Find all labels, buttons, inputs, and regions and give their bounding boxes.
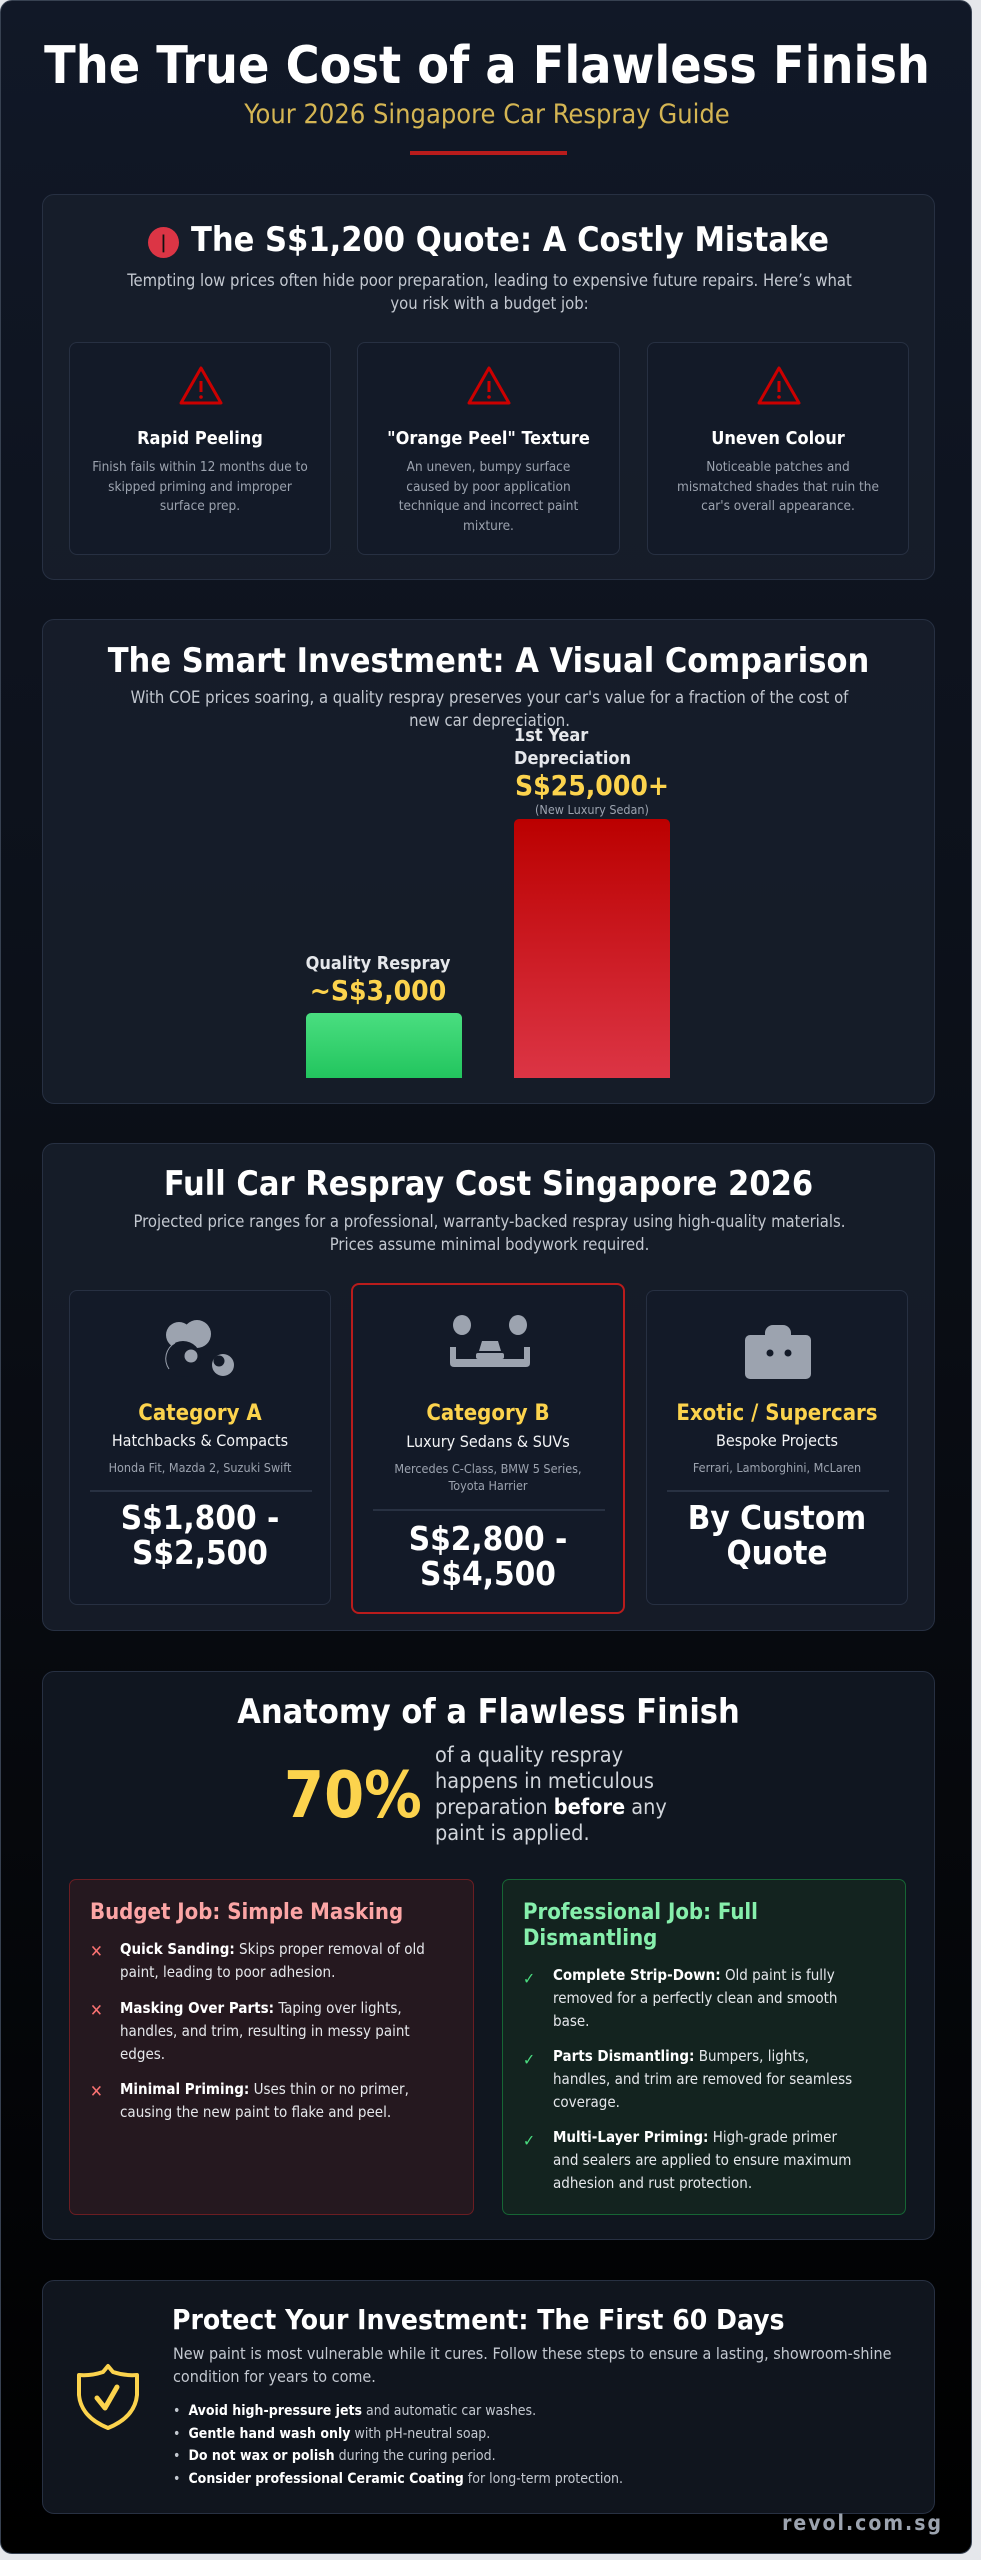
- bar label: depreciation: Depreciation: [514, 748, 631, 769]
- card: category B (highlighted): [351, 1283, 625, 1614]
- bar label: quality respray: ~S$3,000: [310, 974, 446, 1007]
- bullet list: [173, 2403, 623, 2486]
- item: priming: ✓: [523, 2131, 535, 2150]
- heading: S$1,200 quote: |: [160, 232, 166, 253]
- subtitle: Your 2026 Singapore Car Respray Guide: [244, 99, 730, 130]
- intro text: Projected price ranges for a professional, warranty-backed respray using high-quality materials. Prices assume minimal bodywork required.: [134, 1212, 845, 1254]
- footer brand: revol.com.sg: [782, 2511, 943, 2535]
- bar label: quality respray: [306, 953, 450, 1007]
- item: strip-down: ✓: [523, 1969, 535, 1988]
- example models: Honda Fit, Mazda 2, Suzuki Swift: [109, 1460, 291, 1475]
- item: strip-down: removed for a perfectly clean and smooth: [553, 1989, 837, 2007]
- icon: shield: [77, 2364, 139, 2430]
- panel: protect investment: [42, 2280, 935, 2514]
- item: dismantling: coverage.: [553, 2093, 620, 2111]
- category title: Exotic / Supercars: [676, 1401, 878, 1426]
- item: priming: [523, 2128, 851, 2192]
- icon: exotic car: [745, 1325, 811, 1379]
- example models: Ferrari, Lamborghini, McLaren: [693, 1460, 861, 1475]
- icon: warning: [758, 366, 801, 404]
- item: strip-down: Complete Strip-Down: Old paint is fully: [553, 1966, 835, 1984]
- category title: Category A: [138, 1401, 262, 1426]
- item: priming: Multi-Layer Priming: High-grade primer: [553, 2128, 837, 2146]
- card: uneven colour: [647, 342, 909, 555]
- big number: 70%: [284, 1759, 422, 1833]
- item: dismantling: handles, and trim are removed for seamless: [553, 2070, 852, 2088]
- price: By Custom: [688, 1498, 866, 1537]
- card title: "Orange Peel" Texture: [387, 428, 590, 449]
- item: minimal priming: ✕: [90, 2082, 103, 2102]
- item: quick sanding: ✕: [90, 1942, 103, 1962]
- price: [688, 1498, 866, 1572]
- card: rapid peeling: [69, 342, 331, 555]
- card title: Uneven Colour: [711, 428, 845, 449]
- card: orange peel: [357, 342, 620, 555]
- heading: Protect Your Investment: The First 60 Days: [172, 2303, 785, 2336]
- bar label: depreciation: (New Luxury Sedan): [535, 802, 649, 817]
- bar label: depreciation: [514, 725, 669, 817]
- item: strip-down: [523, 1966, 837, 2030]
- item: minimal priming: Minimal Priming: Uses thin or no primer, causing the new paint to flake and peel.: [120, 2080, 409, 2121]
- intro text: New paint is most vulnerable while it cures. Follow these steps to ensure a lasting, showroom-shine condition for years to come.: [173, 2344, 891, 2386]
- icon: warning: [468, 366, 511, 404]
- box title: Professional Job: Full Dismantling: [523, 1900, 758, 1951]
- bar label: depreciation: 1st Year: [514, 725, 588, 746]
- bar: green: [306, 1013, 462, 1078]
- icon: warning: [180, 366, 223, 404]
- price: [409, 1519, 567, 1593]
- category subtitle: Bespoke Projects: [716, 1431, 838, 1450]
- panel: visual comparison: [42, 619, 935, 1104]
- intro text: With COE prices soaring, a quality respray preserves your car's value for a fraction of the cost of new car depreciation.: [131, 688, 848, 730]
- title: The True Cost of a Flawless Finish: [44, 36, 930, 96]
- category subtitle: Hatchbacks & Compacts: [112, 1431, 288, 1450]
- heading: Full Car Respray Cost Singapore 2026: [164, 1164, 813, 1204]
- card text: Finish fails within 12 months due to skipped priming and improper surface prep.: [92, 459, 308, 514]
- category subtitle: Luxury Sedans & SUVs: [406, 1432, 570, 1451]
- heading: The Smart Investment: A Visual Comparison: [108, 641, 869, 681]
- intro text: Tempting low prices often hide poor preparation, leading to expensive future repairs. Here’s what you risk with a budget job:: [127, 271, 852, 312]
- price: S$2,500: [132, 1533, 268, 1572]
- example models: Mercedes C-Class, BMW 5 Series, Toyota Harrier: [394, 1461, 582, 1493]
- price: S$2,800 -: [409, 1519, 567, 1558]
- item: strip-down: base.: [553, 2012, 589, 2030]
- card: exotic: [646, 1290, 908, 1605]
- bullet list: • Avoid high-pressure jets and automatic car washes.: [173, 2403, 536, 2419]
- bullet list: • Consider professional Ceramic Coating for long-term protection.: [173, 2470, 623, 2486]
- card: category A: [69, 1290, 331, 1605]
- panel: costly mistake: [42, 194, 935, 580]
- card title: Rapid Peeling: [137, 428, 263, 449]
- price: S$4,500: [420, 1554, 556, 1593]
- heading: S$1,200 quote: The S$1,200 Quote: A Costly Mistake: [191, 220, 829, 260]
- box: professional job: [502, 1879, 906, 2215]
- item: quick sanding: Quick Sanding: Skips proper removal of old paint, leading to poor adhesion.: [120, 1940, 425, 1981]
- panel: cost categories: [42, 1143, 935, 1631]
- item: masking: ✕: [90, 2001, 103, 2021]
- panel: anatomy: [42, 1671, 935, 2240]
- item: dismantling: Parts Dismantling: Bumpers, lights,: [553, 2047, 809, 2065]
- bar: red: [514, 819, 670, 1078]
- icon: compact car: [165, 1320, 234, 1376]
- box title: Budget Job: Simple Masking: [90, 1900, 403, 1925]
- price: Quote: [726, 1533, 828, 1572]
- category title: Category B: [426, 1401, 550, 1426]
- title underline: [410, 151, 567, 155]
- stat text: of a quality respray happens in meticulous preparation before any paint is applied.: [435, 1743, 667, 1846]
- price: [121, 1498, 279, 1572]
- price: S$1,800 -: [121, 1498, 279, 1537]
- stat: 70%: [284, 1743, 667, 1846]
- bar chart: [306, 725, 670, 1078]
- card text: Noticeable patches and mismatched shades that ruin the car's overall appearance.: [677, 459, 879, 514]
- bar label: depreciation: S$25,000+: [515, 769, 669, 802]
- heading: Anatomy of a Flawless Finish: [237, 1692, 740, 1732]
- item: dismantling: [523, 2047, 852, 2111]
- item: masking: Masking Over Parts: Taping over lights, handles, and trim, resulting in messy paint edges.: [120, 1999, 410, 2063]
- item: priming: adhesion and rust protection.: [553, 2174, 752, 2192]
- bar label: quality respray: Quality Respray: [306, 953, 450, 974]
- bullet list: • Do not wax or polish during the curing period.: [173, 2448, 496, 2464]
- bullet list: • Gentle hand wash only with pH-neutral soap.: [173, 2426, 490, 2442]
- item: priming: and sealers are applied to ensure maximum: [553, 2151, 851, 2169]
- box: budget job: [69, 1879, 474, 2215]
- card text: An uneven, bumpy surface caused by poor application technique and incorrect paint mixture.: [399, 459, 578, 534]
- icon: luxury sedan: [450, 1315, 530, 1367]
- item: dismantling: ✓: [523, 2050, 535, 2069]
